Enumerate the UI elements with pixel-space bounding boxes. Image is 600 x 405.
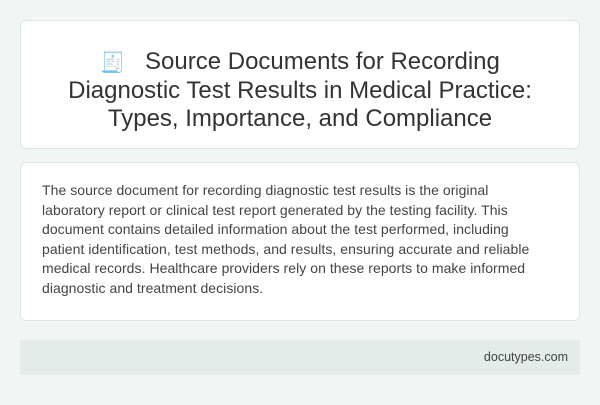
panel: title — [20, 20, 580, 149]
text block: document contains detailed information about the test performed, including — [42, 221, 509, 237]
text block: The source document for recording diagnostic test results is the original — [42, 182, 488, 198]
text block: diagnostic and treatment decisions. — [42, 280, 263, 296]
text block: medical records. Healthcare providers rely on these reports to make informed — [42, 260, 525, 276]
footer: docutypes.com — [484, 350, 568, 364]
text block — [42, 182, 529, 296]
title — [68, 48, 532, 132]
title: Types, Importance, and Compliance — [108, 105, 492, 132]
title: Diagnostic Test Results in Medical Practice: — [68, 77, 532, 104]
footer — [20, 340, 580, 375]
panel: description — [20, 162, 580, 321]
text block: laboratory report or clinical test report generated by the testing facility. This — [42, 202, 508, 218]
text block: patient identification, test methods, and results, ensuring accurate and reliable — [42, 241, 529, 257]
title: 🧾 Source Documents for Recording — [100, 48, 500, 75]
